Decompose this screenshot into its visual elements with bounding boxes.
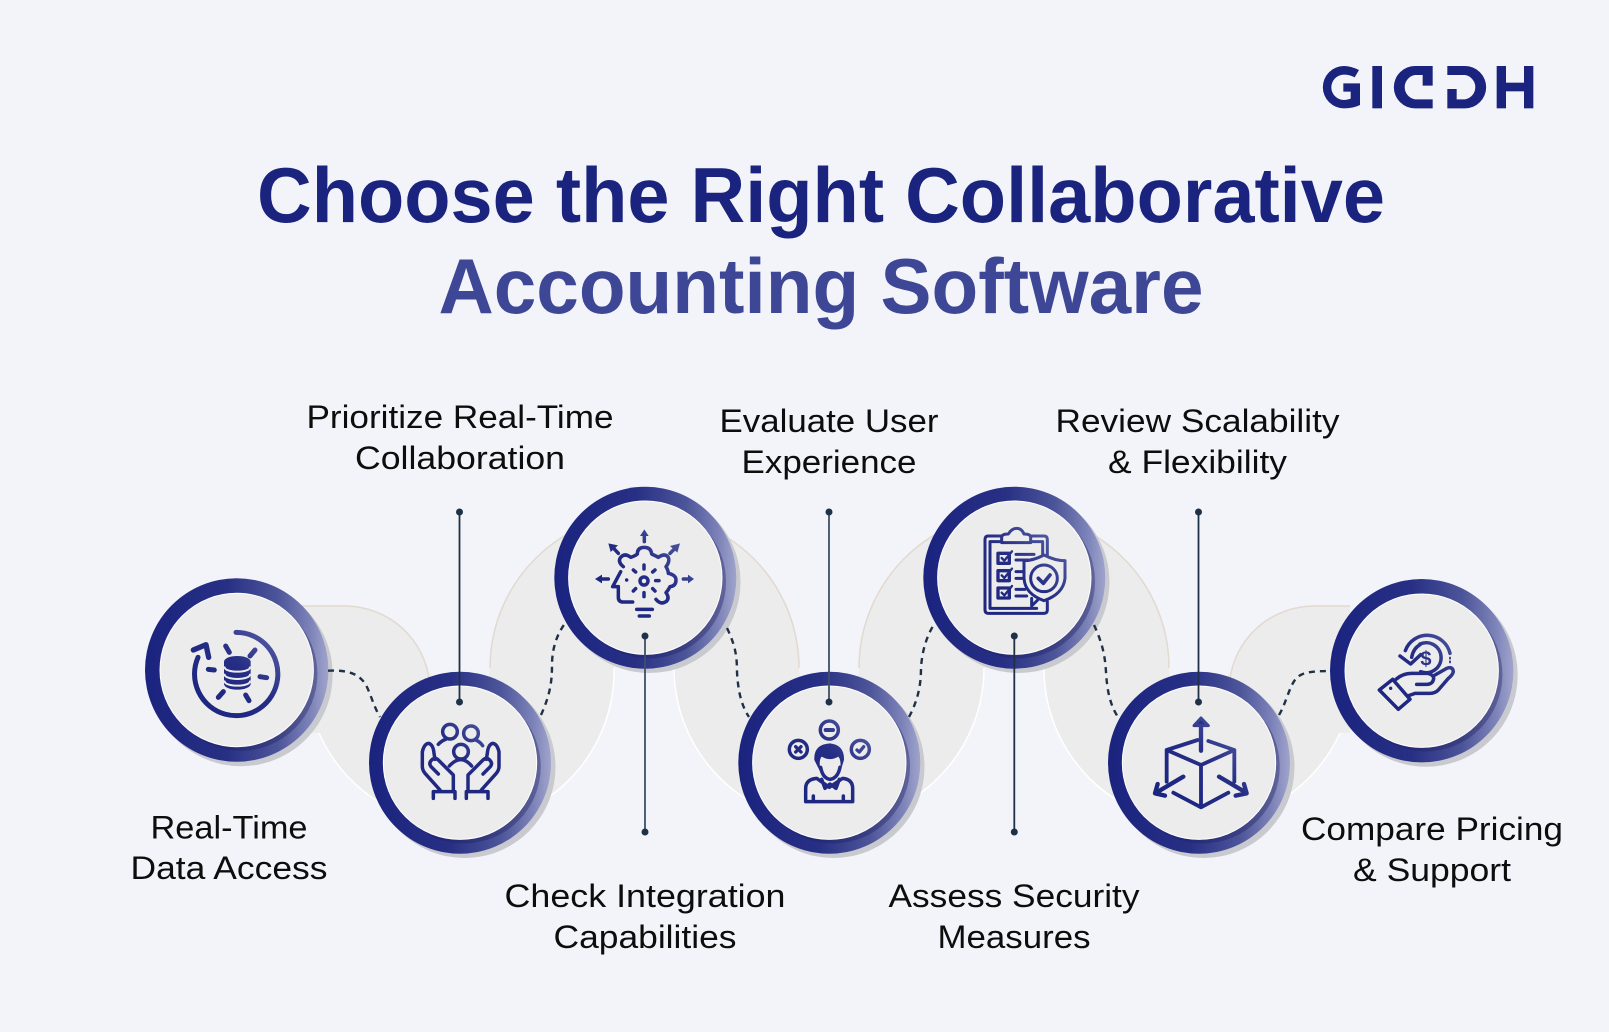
circle 7 xyxy=(1330,579,1518,767)
circle 2 xyxy=(369,672,556,858)
title: Choose the Right Collaborative xyxy=(257,151,1385,239)
circle 6 xyxy=(1108,672,1294,858)
connector line: Review Scalability & Flexibility xyxy=(1195,508,1202,706)
label: Evaluate User Experience: Evaluate User xyxy=(720,403,939,439)
title xyxy=(257,151,1385,330)
dashed connectors xyxy=(328,622,1330,717)
label: Review Scalability & Flexibility: & Flexibility xyxy=(1108,444,1287,480)
label: Compare Pricing & Support xyxy=(1301,811,1563,888)
label: Prioritize Real-Time Collaboration: Collaboration xyxy=(355,440,565,476)
label: Real-Time Data Access xyxy=(130,810,328,886)
connector line: Assess Security Measures xyxy=(1011,632,1018,836)
icon: user experience xyxy=(789,721,869,802)
label: Real-Time Data Access: Data Access xyxy=(130,850,328,886)
label: Check Integration Capabilities: Capabilities xyxy=(554,919,736,955)
label: Assess Security Measures: Assess Security xyxy=(888,878,1140,914)
circle 3 xyxy=(554,487,740,673)
circle 5 xyxy=(923,487,1110,673)
label: Evaluate User Experience xyxy=(720,403,939,480)
label: Compare Pricing & Support: & Support xyxy=(1353,852,1511,888)
connector line: Evaluate User Experience xyxy=(826,508,832,706)
label: Assess Security Measures xyxy=(888,878,1140,955)
icon: security checklist xyxy=(985,528,1065,613)
icon: collaboration hands xyxy=(422,724,499,798)
label: Prioritize Real-Time Collaboration xyxy=(306,399,614,476)
icon: integration gear head xyxy=(595,529,694,616)
label: Check Integration Capabilities xyxy=(504,878,786,955)
title: Accounting Software xyxy=(438,242,1204,330)
circle 4 xyxy=(738,672,924,858)
label: Review Scalability & Flexibility xyxy=(1056,403,1340,480)
icon: pricing hand xyxy=(1379,635,1453,709)
label: Evaluate User Experience: Experience xyxy=(742,444,916,480)
label: Compare Pricing & Support: Compare Pricing xyxy=(1301,811,1563,847)
icon: real-time data xyxy=(193,632,278,716)
label: Prioritize Real-Time Collaboration: Prioritize Real-Time xyxy=(306,399,614,435)
label: Check Integration Capabilities: Check Integration xyxy=(504,878,786,914)
circle 1 xyxy=(145,578,333,766)
icon: scalability cube xyxy=(1155,718,1247,807)
logo: GIDDH xyxy=(1323,66,1533,108)
connector line: Prioritize Real-Time Collaboration xyxy=(456,508,463,706)
wave ribbon behind the circles xyxy=(300,513,1350,825)
icon: pricing hand: $ xyxy=(1420,648,1432,670)
label: Assess Security Measures: Measures xyxy=(938,919,1090,955)
connector line: Check Integration Capabilities xyxy=(642,632,648,836)
label: Real-Time Data Access: Real-Time xyxy=(150,810,308,846)
label: Review Scalability & Flexibility: Review Scalability xyxy=(1056,403,1340,439)
